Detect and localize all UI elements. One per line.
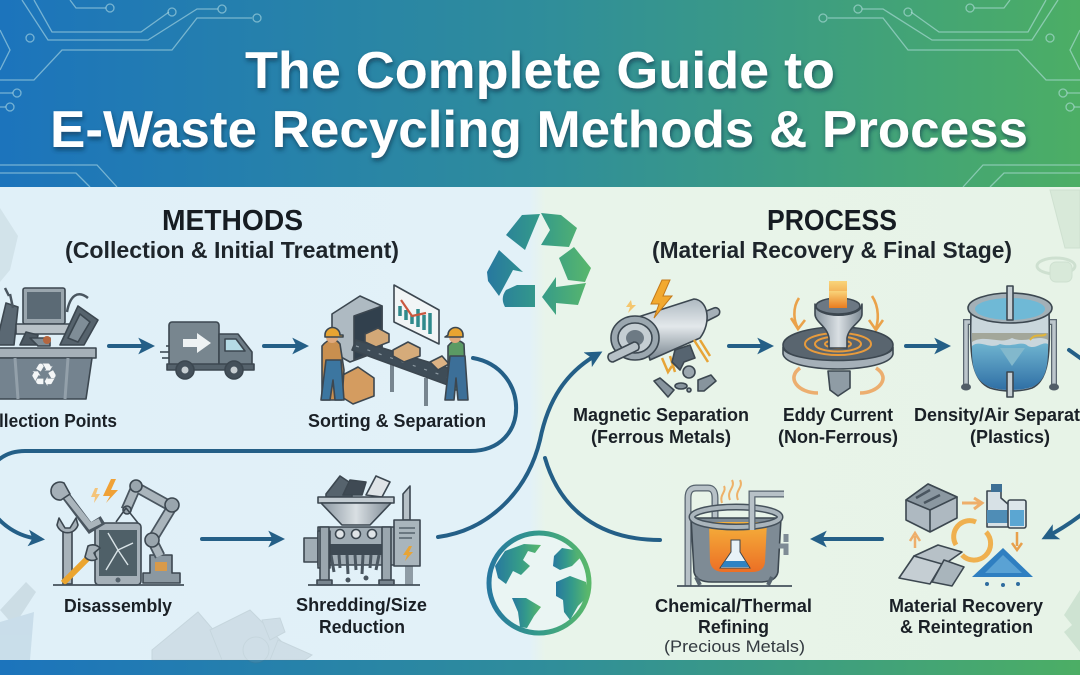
icon: shredder <box>304 476 420 585</box>
arrow: eddy to density <box>906 344 946 348</box>
arrow: magnetic to eddy <box>729 344 769 348</box>
icon: recycling symbol on bin: ♻ <box>30 356 58 394</box>
heading: process: PROCESS <box>767 205 897 237</box>
label: refining: Refining <box>698 617 769 637</box>
ghost decoration: bottom-left bin <box>0 582 36 660</box>
arrow: density to material recovery <box>1046 350 1080 537</box>
icon: density separation tank <box>961 286 1059 397</box>
subheading: methods: (Collection & Initial Treatment) <box>65 237 399 263</box>
section: process <box>545 205 1080 656</box>
label: shredding: Shredding/Size <box>296 595 427 615</box>
icon: eddy current separator <box>783 281 893 396</box>
icon: sorting line with workers <box>321 285 468 406</box>
title: The Complete Guide to <box>245 42 835 100</box>
icon: magnetic separator drum <box>608 280 720 397</box>
label: non-ferrous: (Non-Ferrous) <box>778 427 898 447</box>
label: precious metals: (Precious Metals) <box>664 637 805 656</box>
label: sorting and separation: Sorting & Separation <box>308 411 486 431</box>
footer bar <box>0 660 1080 675</box>
icon: disassembly tools and robot arm <box>51 479 184 585</box>
icon: collection bin <box>0 288 98 399</box>
ghost decoration: right top bin and chain <box>1037 190 1080 282</box>
worker left <box>321 328 344 400</box>
label: reintegration: & Reintegration <box>900 617 1033 637</box>
icon: large recycling symbol <box>487 213 591 315</box>
ghost decoration: left top bin <box>0 208 18 282</box>
subheading: process: (Material Recovery & Final Stage) <box>652 237 1012 263</box>
icon: refining reactor <box>677 480 792 586</box>
arrow: truck to sorting <box>264 344 304 348</box>
label: disassembly: Disassembly <box>64 596 172 616</box>
label: size reduction: Reduction <box>319 617 405 637</box>
circuit pattern: left <box>0 0 261 187</box>
label: plastics: (Plastics) <box>970 427 1050 447</box>
circuit pattern: right <box>819 0 1080 187</box>
title <box>50 42 1028 159</box>
arrow: shredding across to magnetic separation <box>438 354 598 537</box>
title: E-Waste Recycling Methods & Process <box>50 101 1028 159</box>
icon: truck <box>160 322 254 379</box>
icon: material recovery cycle <box>899 484 1033 587</box>
icon: globe <box>489 533 589 633</box>
header banner <box>0 0 1080 187</box>
label: magnetic separation: Magnetic Separation <box>573 405 749 425</box>
heading: methods: METHODS <box>162 205 303 237</box>
arrow: sorting to disassembly (S-curve) <box>0 358 516 539</box>
arrow: disassembly to shredding <box>202 537 280 541</box>
label: eddy current: Eddy Current <box>783 405 893 425</box>
arrow: bin to truck <box>109 344 150 348</box>
arrow: recovery to refining <box>815 537 882 541</box>
arrow: refining back around the globe <box>545 458 660 540</box>
section: methods <box>0 205 516 637</box>
worker right <box>445 328 468 400</box>
ghost decoration: right bottom recycle <box>1064 590 1080 652</box>
label: chemical/thermal: Chemical/Thermal <box>655 596 812 616</box>
ghost decoration: device pile <box>152 610 312 663</box>
label: material recovery: Material Recovery <box>889 596 1043 616</box>
panel backdrop: methods and process <box>0 187 1080 660</box>
label: ferrous metals: (Ferrous Metals) <box>591 427 731 447</box>
